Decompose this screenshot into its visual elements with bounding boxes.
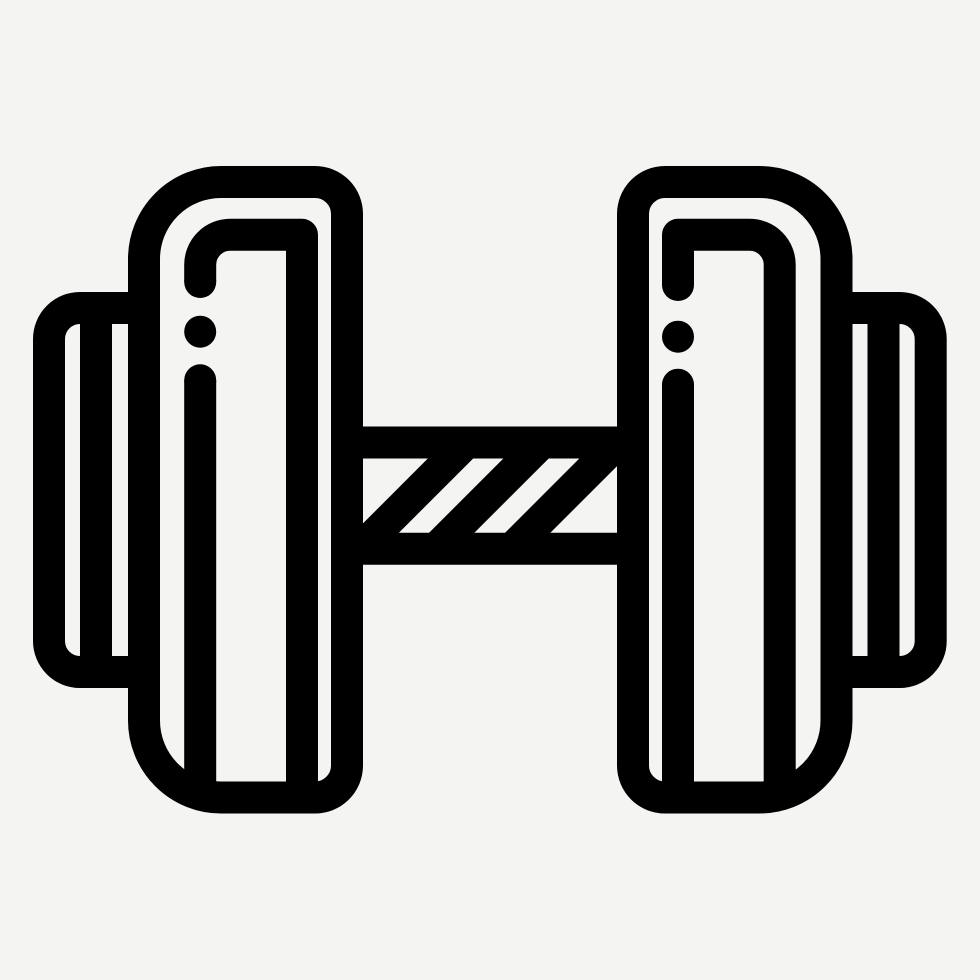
left main weight plate <box>144 182 347 798</box>
right outer weight plate <box>836 308 931 672</box>
left outer weight plate <box>49 308 144 672</box>
handle with diagonal stripes <box>350 442 630 549</box>
right main weight plate <box>633 182 836 798</box>
